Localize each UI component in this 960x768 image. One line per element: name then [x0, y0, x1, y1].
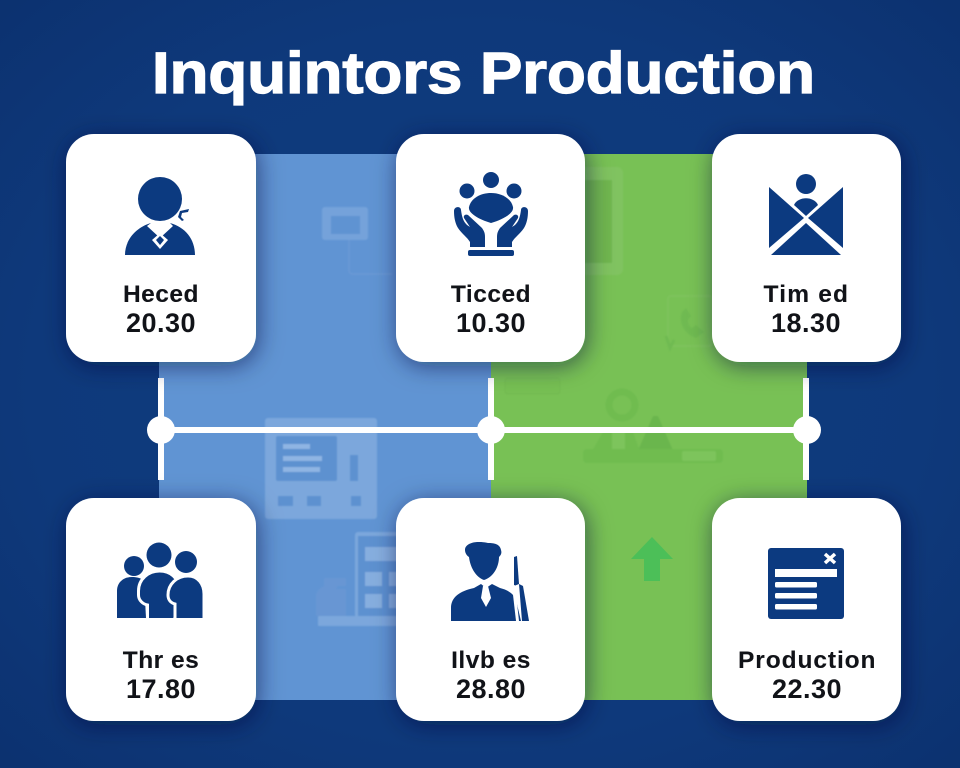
- label: Ilvb es 28.80: Ilvb es: [451, 647, 531, 674]
- icon: green up arrow: [631, 537, 673, 581]
- icon: document window: [768, 548, 844, 619]
- icon: envelope with person: [769, 174, 843, 255]
- ghost icon: small device: [322, 207, 392, 274]
- label: Thr es 17.80: 17.80: [126, 674, 196, 704]
- label: Ilvb es 28.80: 28.80: [456, 674, 526, 704]
- card: Ticced: [396, 134, 585, 362]
- label: Thr es 17.80: [123, 647, 199, 704]
- label: Thr es 17.80: Thr es: [123, 647, 199, 674]
- card: Production: [712, 498, 901, 721]
- label: Tim ed 18.30: 18.30: [771, 308, 841, 338]
- icon: hands holding group: [454, 172, 528, 256]
- icon: person with tie: [125, 177, 195, 255]
- label: Heced 20.30: Heced: [123, 281, 199, 308]
- label: Production 22.30: 22.30: [772, 674, 842, 704]
- label: Production 22.30: Production: [738, 647, 876, 674]
- icon: person with staff: [451, 542, 529, 621]
- timeline connector: [147, 378, 821, 480]
- label: Ticced 10.30: 10.30: [456, 308, 526, 338]
- card: Ilvb es: [396, 498, 585, 721]
- label: Heced 20.30: 20.30: [126, 308, 196, 338]
- card: Thr es: [66, 498, 256, 721]
- ghost icon: dashboard: [265, 418, 377, 519]
- label: Ticced 10.30: Ticced: [451, 281, 531, 308]
- label: Tim ed 18.30: [764, 281, 848, 338]
- label: Ticced 10.30: [451, 281, 531, 338]
- label: Ilvb es 28.80: [451, 647, 531, 704]
- ghost icon: worker scene: [505, 378, 723, 463]
- label: Production 22.30: [738, 647, 876, 704]
- label: Tim ed 18.30: Tim ed: [764, 281, 848, 308]
- title: Inquintors Production: [152, 41, 815, 106]
- ghost icon: calculator: [316, 532, 418, 626]
- panel: blue background: [159, 154, 491, 700]
- ghost icon: document: [570, 167, 623, 275]
- label: Heced 20.30: [123, 281, 199, 338]
- ghost icon: phone: [666, 296, 712, 348]
- panel: green background: [491, 154, 807, 700]
- icon: three people: [116, 542, 206, 623]
- card: Timed: [712, 134, 901, 362]
- card: Heced: [66, 134, 256, 362]
